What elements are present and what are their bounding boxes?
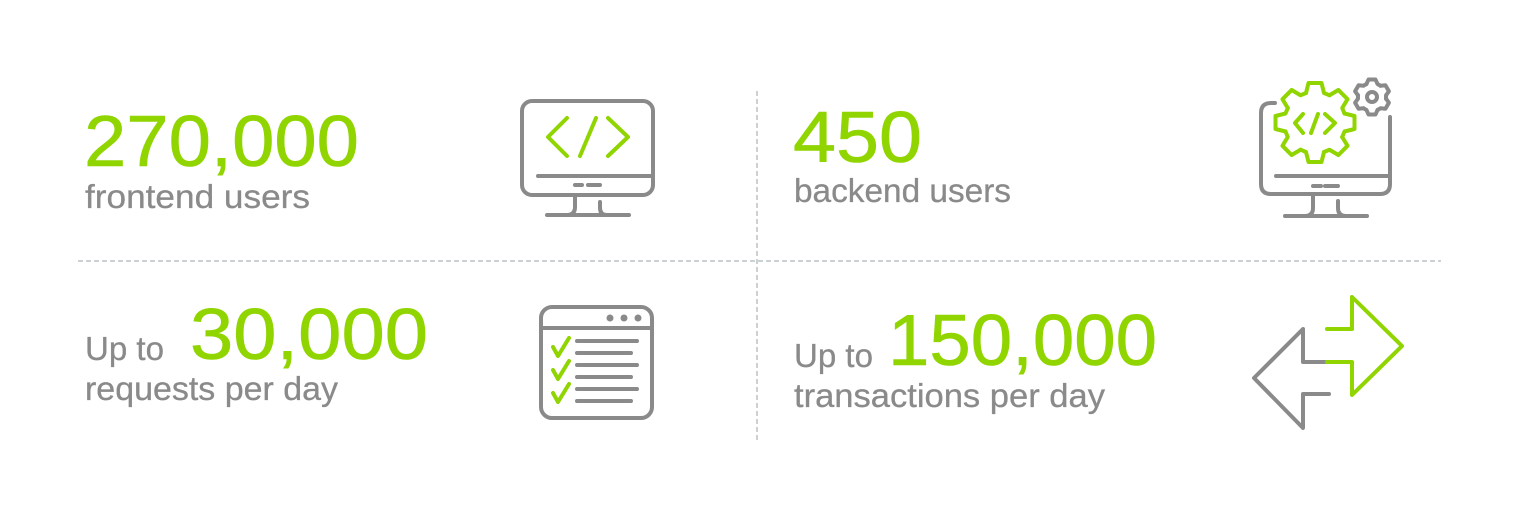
icon: exchange arrows — [1254, 297, 1402, 428]
icon: monitor with code — [522, 101, 653, 215]
icon: green gear — [1276, 83, 1354, 162]
icon: grey gear — [1353, 80, 1391, 114]
panel: backend users — [793, 80, 1391, 216]
label: Up to: Up to — [794, 337, 873, 374]
label: requests per day: requests per day — [85, 370, 339, 407]
label: backend users: backend users — [794, 172, 1011, 209]
label: Up to: Up to — [85, 330, 164, 367]
label: transactions per day: transactions per day — [794, 377, 1106, 414]
stat: 150,000: 150,000 — [888, 301, 1157, 381]
panel: requests per day — [85, 295, 652, 418]
stat: 450: 450 — [793, 98, 922, 178]
panel: transactions per day — [794, 297, 1402, 428]
icon: monitor with gears — [1261, 80, 1391, 216]
stat: 30,000: 30,000 — [190, 295, 428, 375]
panel: frontend users — [84, 101, 653, 215]
label: frontend users: frontend users — [85, 178, 310, 215]
icon: checklist window — [541, 307, 652, 418]
stat: 270,000: 270,000 — [84, 102, 359, 182]
